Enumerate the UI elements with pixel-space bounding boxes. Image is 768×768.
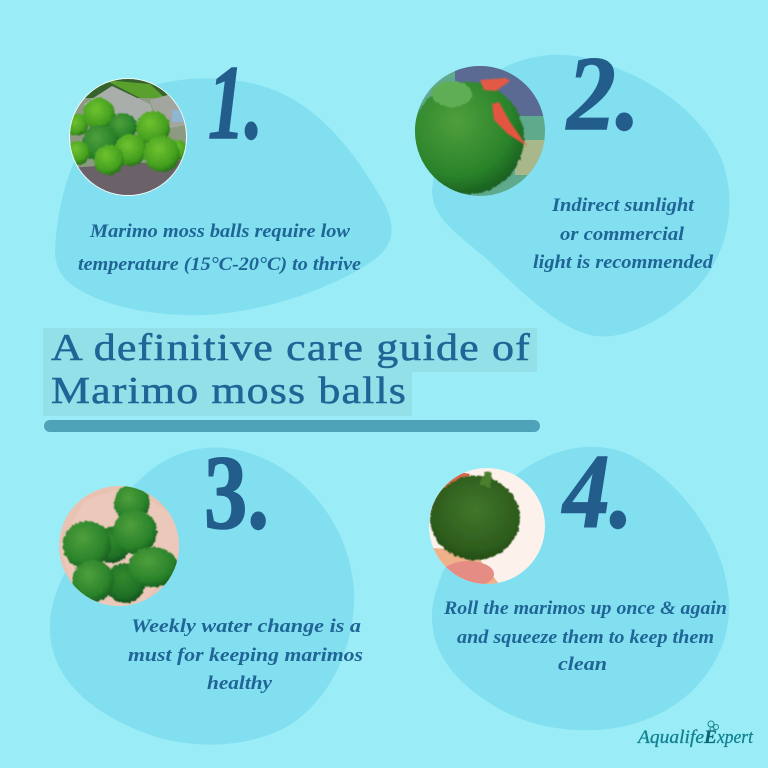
- text: step 3: Weekly water change is a: [131, 616, 362, 637]
- panel: step 4 squeeze and clean: [428, 433, 729, 730]
- number 2: 2.: [565, 35, 640, 152]
- logo: Aqualife Expert: [636, 721, 754, 748]
- title text: A definitive care guide of: [51, 327, 531, 369]
- logo wordmark: E: [703, 727, 717, 748]
- blob 3: [50, 448, 354, 745]
- blob 2: [432, 55, 729, 337]
- title text: Marimo moss balls: [51, 370, 407, 412]
- number 4: 4.: [561, 433, 633, 550]
- panel: step 3 water change: [50, 434, 363, 745]
- text: step 2: light is recommended: [533, 252, 714, 273]
- logo icon: [708, 721, 718, 731]
- text: step 3: must for keeping marimos: [128, 645, 363, 666]
- text: step 4: and squeeze them to keep them: [457, 627, 714, 648]
- text: step 4: Roll the marimos up once & again: [443, 598, 727, 619]
- blob 1: [55, 78, 392, 315]
- number 3: 3.: [204, 434, 269, 551]
- photo: moss ball held in fingers: [428, 468, 545, 590]
- panel: step 2 light: [412, 35, 729, 337]
- photo: moss balls in hands: [59, 485, 179, 606]
- text: step 4: clean: [558, 654, 607, 675]
- text: step 1: temperature (15°C-20°C) to thrive: [78, 254, 362, 275]
- photo: moss balls on gravel: [66, 78, 188, 198]
- logo wordmark: xpert: [716, 727, 754, 748]
- number 1: 1.: [208, 44, 263, 161]
- photo: moss ball with red shrimp: [412, 66, 545, 196]
- logo wordmark: Aqualife: [636, 727, 704, 748]
- blob 4: [432, 447, 729, 730]
- heading: title: [43, 327, 540, 432]
- title highlight: [43, 328, 537, 416]
- text: step 2: or commercial: [560, 224, 685, 245]
- title underline: [44, 420, 540, 432]
- text: step 1: Marimo moss balls require low: [89, 221, 350, 242]
- text: step 2: Indirect sunlight: [551, 195, 695, 216]
- panel: step 1 low temperature: [55, 44, 392, 315]
- text: step 3: healthy: [207, 673, 273, 694]
